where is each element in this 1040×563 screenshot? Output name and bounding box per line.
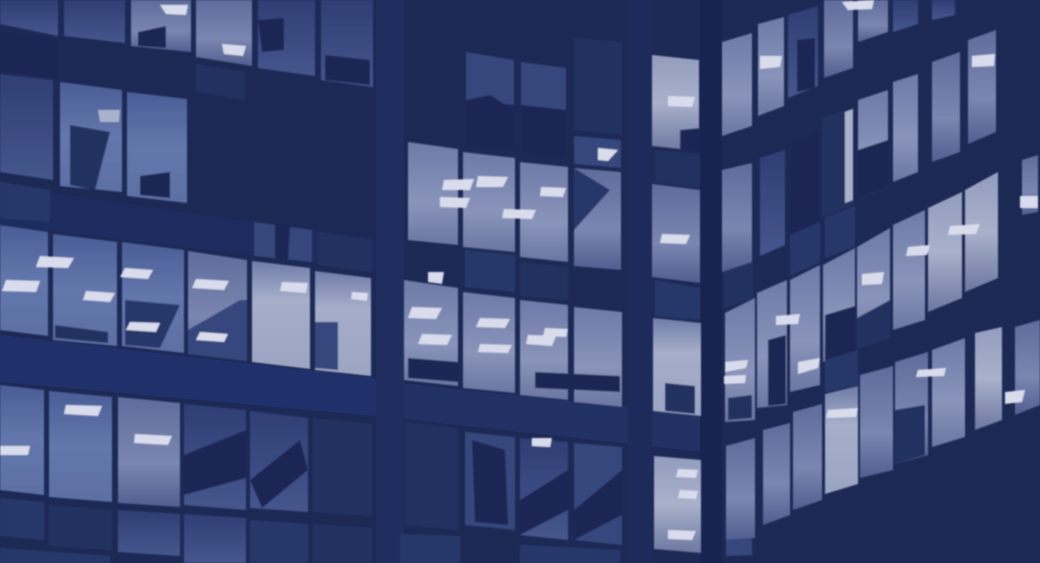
third row lit windows bbox=[0, 222, 372, 376]
left block windows bbox=[0, 0, 373, 563]
right column lit windows bbox=[652, 55, 701, 553]
fourth row windows with reflections bbox=[0, 385, 372, 516]
right block windows in perspective bbox=[722, 0, 1040, 556]
centre upper lit windows bbox=[408, 136, 621, 270]
second row windows bbox=[0, 64, 245, 222]
centre upper dark windows bbox=[466, 38, 622, 158]
structural bands and pillars bbox=[0, 0, 722, 563]
third perspective row bbox=[724, 172, 998, 422]
second perspective row bbox=[722, 30, 1038, 272]
bottom row windows bbox=[0, 498, 372, 563]
fourth perspective row bbox=[726, 320, 1040, 556]
centre lower lit windows bbox=[404, 250, 622, 407]
upper perspective row bbox=[722, 0, 955, 136]
top row windows bbox=[0, 0, 373, 87]
centre block windows bbox=[400, 38, 701, 563]
centre bottom reflective windows bbox=[400, 422, 622, 563]
